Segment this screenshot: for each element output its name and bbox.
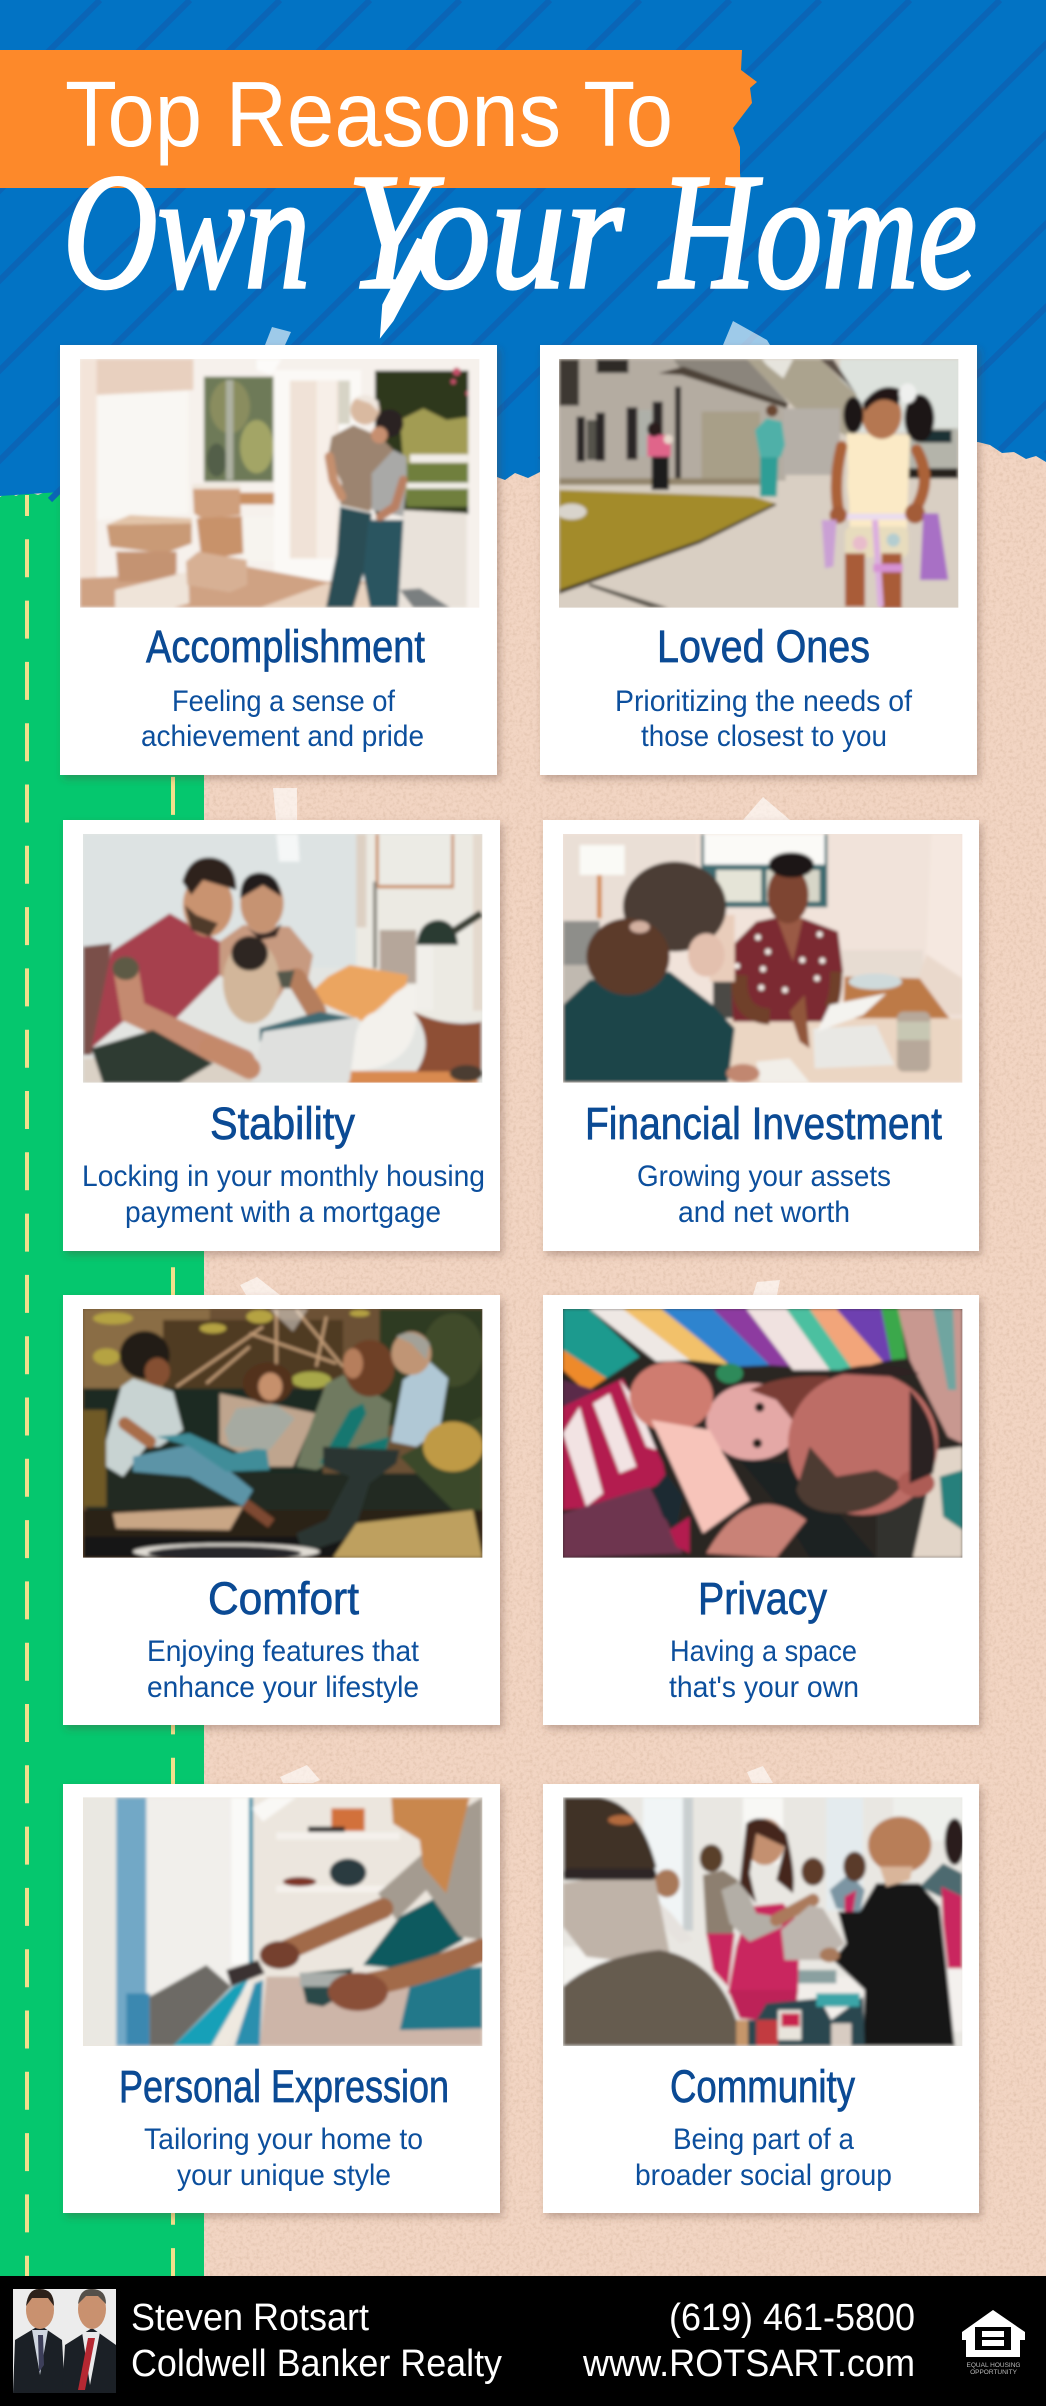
icon: equal housing opportunity: EQUAL HOUSING [967,2362,1020,2369]
panel: Accomplishment card [60,340,500,775]
agent name and brokerage: Steven Rotsart [131,2297,369,2339]
heading: Personal Expression: Personal Expression [119,2061,449,2112]
title: Own Your Home: Own [63,140,310,323]
description: Privacy: Having a space [670,1635,857,1668]
photo: two men and pug on sofa [83,834,482,1083]
description: Accomplishment [141,685,424,753]
description: Financial Investment: Growing your assets [637,1160,891,1193]
description: Comfort: enhance your lifestyle [147,1671,419,1704]
orange torn banner [0,50,757,188]
description: Personal Expression: your unique style [177,2159,391,2192]
description: Community: broader social group [635,2159,892,2192]
phone and website: www.ROTSART.com [582,2343,915,2385]
description: Personal Expression [144,2123,423,2192]
heading: Comfort: Comfort [208,1573,359,1624]
panel: Financial Investment card [543,815,983,1251]
photo: food bank volunteers [563,1797,962,2046]
panel: Personal Expression card [63,1780,503,2213]
panel: Loved Ones card [540,340,980,775]
tape strips above the cards [240,321,790,1783]
description: Stability [82,1160,485,1229]
description: Accomplishment: Feeling a sense of [172,685,396,718]
description: Loved Ones [615,685,913,753]
description: Accomplishment: achievement and pride [141,720,424,753]
description: Loved Ones: Prioritizing the needs of [615,685,913,718]
description: Stability: payment with a mortgage [125,1196,441,1229]
title: Own Your Home: Your [347,140,624,323]
phone and website [582,2297,915,2385]
description: Comfort [147,1635,420,1704]
panel: Comfort card [63,1290,503,1725]
description: Community: Being part of a [673,2123,854,2156]
photo: meeting with adviser at table [563,834,962,1083]
description: Stability: Locking in your monthly housing [82,1160,485,1193]
heading: Privacy: Privacy [698,1573,827,1624]
heading: Loved Ones: Loved Ones [657,621,870,672]
photo: father and child under blanket [563,1309,962,1558]
icon: equal housing opportunity [962,2310,1025,2376]
photo: family on outdoor sofa [83,1309,482,1558]
panel: Stability card [63,815,503,1251]
heading: Community: Community [670,2061,855,2112]
description: Financial Investment [637,1160,891,1229]
description: Privacy: that's your own [669,1671,859,1704]
title: Own Your Home [63,140,977,333]
description: Comfort: Enjoying features that [147,1635,420,1668]
description: Privacy [669,1635,859,1704]
phone and website: (619) 461-5800 [669,2297,915,2339]
title: Own Your Home: Home [658,140,977,323]
agent name and brokerage [131,2297,502,2385]
title: Top Reasons To: Top Reasons To [65,62,673,166]
description: Financial Investment: and net worth [678,1196,850,1229]
heading: Financial Investment: Financial Investment [585,1098,942,1149]
background: green strip with stitched dashes [0,490,204,2276]
heading: Stability: Stability [210,1098,355,1149]
agent name and brokerage: Coldwell Banker Realty [131,2343,502,2385]
heading: Accomplishment: Accomplishment [146,621,425,672]
icon: equal housing opportunity: OPPORTUNITY [970,2369,1018,2376]
description: Community [635,2123,892,2192]
description: Loved Ones: those closest to you [641,720,887,753]
panel: Community card [543,1780,983,2213]
footer bar [0,2276,1046,2406]
background: blue torn header with diagonal stripes [0,0,1046,500]
photo: couple with moving boxes [80,359,480,608]
photo: woman painting a wall [83,1797,482,2046]
description: Personal Expression: Tailoring your home to [144,2123,423,2156]
photo: two agents [13,2289,116,2393]
photo: girl on scooter before house [559,359,958,608]
panel: Privacy card [543,1290,983,1725]
